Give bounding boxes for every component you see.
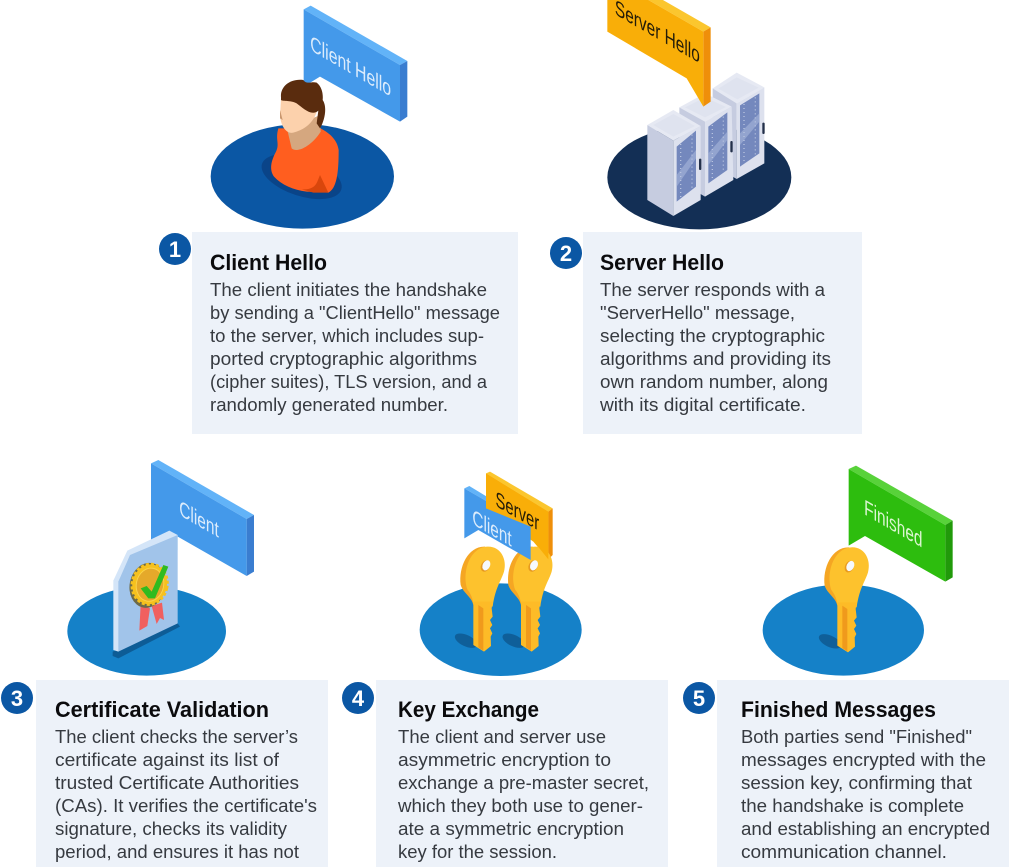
badge 3 [1, 682, 33, 714]
certificate document [113, 531, 180, 658]
heading: Certificate Validation [55, 697, 269, 722]
body text: exchange a pre-master secret, [398, 772, 649, 793]
body text: The client checks the server’s [55, 726, 298, 747]
sign: Server Hello [607, 0, 711, 107]
body text: algorithms and providing its [600, 348, 831, 369]
sign: Client Hello: Client Hello [310, 30, 391, 102]
body text: the handshake is complete [741, 795, 964, 816]
badge 2: 2 [560, 241, 572, 266]
panel: step 1 Client Hello [159, 232, 518, 434]
key [817, 547, 869, 652]
heading: Key Exchange [398, 697, 539, 722]
sign: Finished: Finished [864, 494, 922, 553]
sign: Client: Client [472, 504, 512, 552]
key 2 [500, 547, 553, 652]
heading: Server Hello [600, 250, 724, 275]
body text [210, 279, 500, 415]
illustration: two keys with Client and Server signs [420, 472, 582, 676]
platform ellipse [420, 583, 582, 676]
body text: randomly generated number. [210, 394, 448, 415]
body text [741, 726, 990, 862]
panel: step 3 Certificate Validation [1, 680, 328, 867]
body text: (cipher suites), TLS version, and a [210, 371, 488, 392]
body text: ate a symmetric encryption [398, 818, 624, 839]
heading: Finished Messages [741, 697, 936, 722]
body text: Both parties send "Finished" [741, 726, 972, 747]
sign: Server behind key [486, 472, 553, 559]
key 1 [453, 547, 505, 652]
body text [397, 726, 649, 862]
platform ellipse [607, 125, 791, 229]
badge 1 [159, 233, 191, 265]
badge 1: 1 [169, 237, 181, 262]
body text: ported cryptographic algorithms [210, 348, 477, 369]
body text: The client and server use [398, 726, 606, 747]
badge 5: 5 [693, 686, 705, 711]
illustration: key with Finished sign [763, 466, 953, 676]
body text: with its digital certificate. [599, 394, 806, 415]
body text: which they both use to gener- [397, 795, 643, 816]
body text: selecting the cryptographic [600, 325, 825, 346]
body text: key for the session. [398, 841, 557, 862]
body text: to the server, which includes sup- [210, 325, 484, 346]
server rack 2 [679, 93, 733, 197]
body text: and establishing an encrypted [741, 818, 990, 839]
badge 4 [342, 682, 374, 714]
heading: Client Hello [210, 250, 327, 275]
body text: session key, confirming that [741, 772, 973, 793]
panel: step 2 Server Hello [550, 232, 862, 434]
body text: by sending a "ClientHello" message [210, 302, 500, 323]
sign: Server front [486, 473, 548, 559]
body text [599, 279, 831, 415]
badge 2 [550, 237, 582, 269]
panel: step 4 Key Exchange [342, 680, 668, 867]
body text: trusted Certificate Authorities [55, 772, 299, 793]
body text: communication channel. [741, 841, 947, 862]
platform ellipse [211, 124, 394, 229]
badge 4: 4 [352, 686, 365, 711]
illustration: servers with Server Hello sign [607, 0, 791, 229]
sign: Client [464, 486, 531, 560]
platform ellipse [67, 586, 226, 676]
badge 5 [683, 682, 715, 714]
sign: Finished [849, 466, 953, 582]
body text: (CAs). It verifies the certificate's [55, 795, 317, 816]
body text: own random number, along [600, 371, 828, 392]
body text [55, 726, 317, 867]
server rack 3 [713, 73, 765, 179]
body text: "ServerHello" message, [600, 302, 795, 323]
body text: messages encrypted with the [741, 749, 986, 770]
body text: certificate against its list of [55, 749, 280, 770]
body text: asymmetric encryption to [398, 749, 611, 770]
body text: The server responds with a [600, 279, 826, 300]
platform ellipse [763, 584, 924, 676]
panel: step 5 Finished Messages [683, 680, 1009, 867]
body text: period, and ensures it has not [55, 841, 300, 862]
sign: Client Hello [304, 6, 407, 122]
sign: Server front: Server [496, 486, 539, 536]
illustration: client with Client Hello sign [211, 6, 407, 229]
server rack 1 [647, 110, 701, 216]
sign: Client: Client [179, 495, 219, 543]
body text: signature, checks its validity [55, 818, 288, 839]
illustration: certificate with Client sign [67, 460, 254, 676]
person [256, 80, 347, 208]
body text: The client initiates the handshake [210, 279, 487, 300]
badge 3: 3 [11, 686, 23, 711]
sign: Client [151, 460, 254, 576]
